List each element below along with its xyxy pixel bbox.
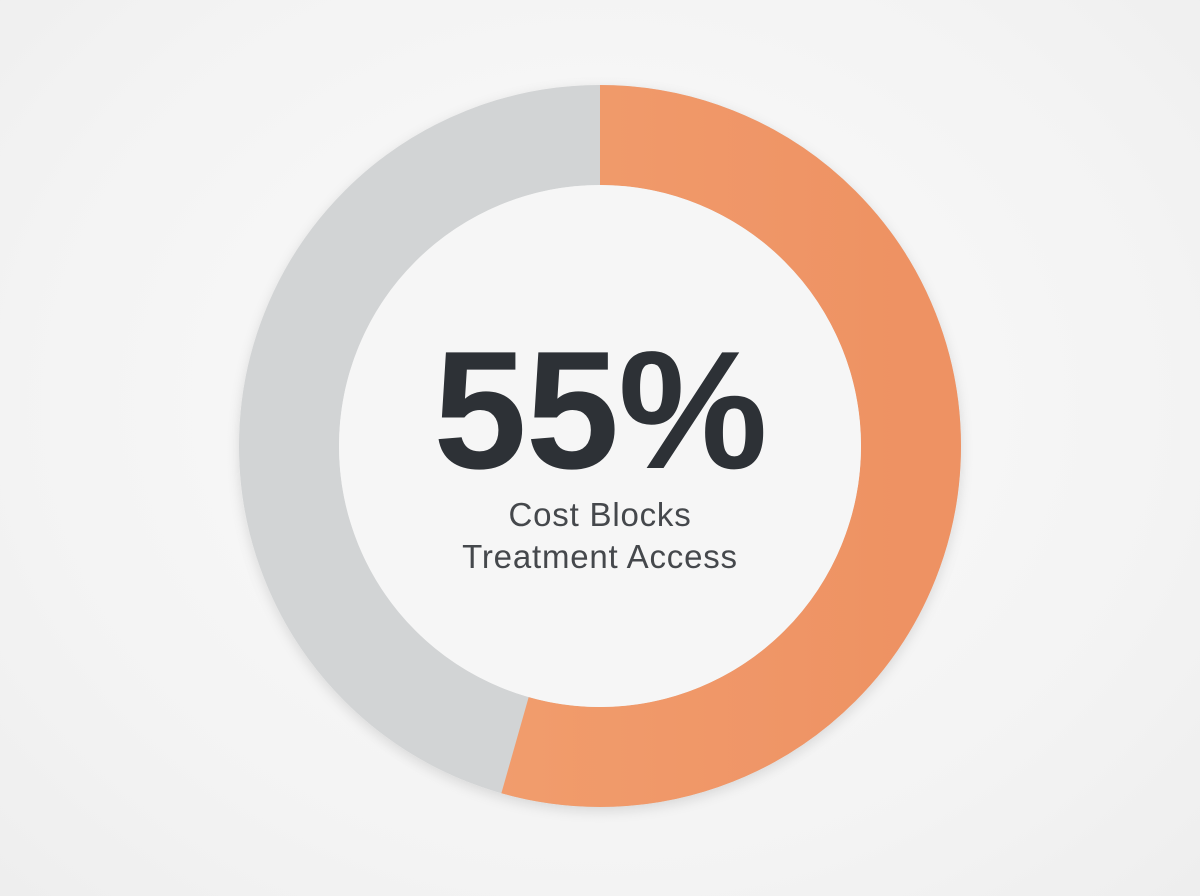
subtitle: Cost Blocks: [508, 496, 692, 533]
subtitle: Treatment Access: [462, 538, 738, 575]
big percentage: 55%: [433, 316, 767, 504]
orange 55% segment: [289, 135, 911, 757]
gray remainder segment: [289, 135, 911, 757]
subtitle: [462, 496, 738, 575]
inner disc: [339, 185, 861, 707]
